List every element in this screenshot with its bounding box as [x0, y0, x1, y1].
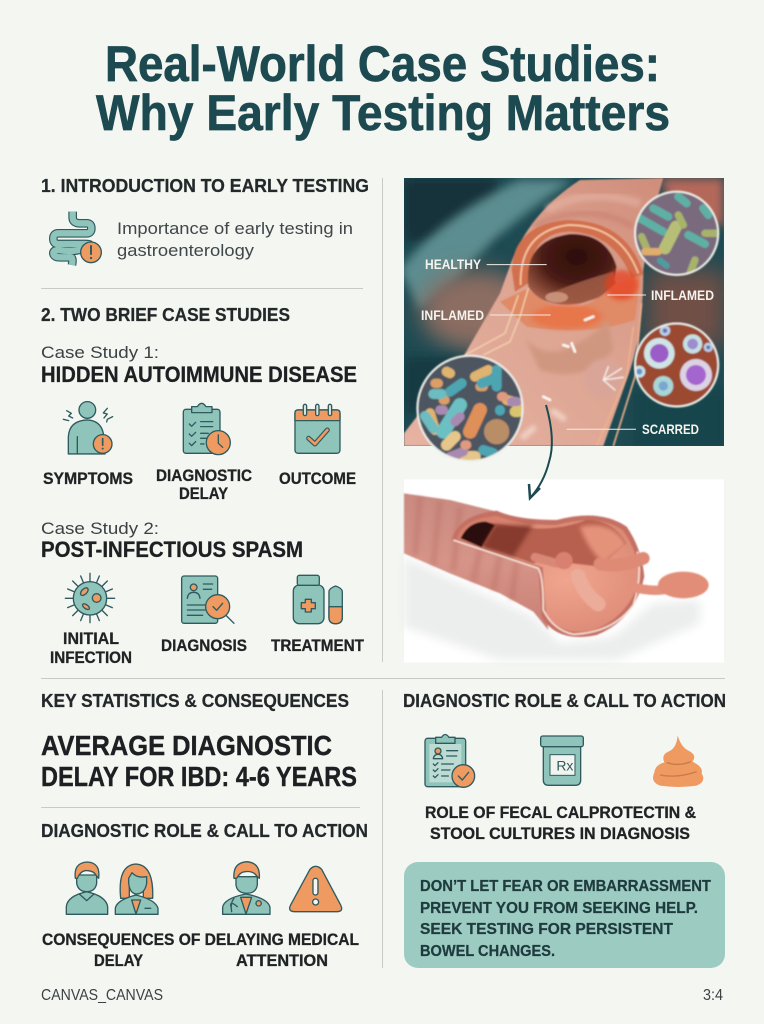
medical illustration: inflamed colon cross section — [400, 178, 727, 461]
panel: introduction — [41, 176, 369, 265]
heading: two brief case studies: 2. TWO BRIEF CASE STUDIES — [41, 305, 290, 325]
icon: doctor — [223, 862, 270, 914]
illustration labels: INFLAMED — [421, 307, 484, 323]
callout lines — [487, 265, 646, 429]
heading: diagnostic role right: DIAGNOSTIC ROLE & CALL TO ACTION — [403, 691, 726, 711]
case study 2 title: Case Study 2: — [41, 519, 159, 538]
intro text: Importance of early testing in — [117, 219, 353, 238]
panel: key statistics — [41, 691, 357, 792]
heading: introduction: 1. INTRODUCTION TO EARLY TESTING — [41, 176, 369, 196]
case study 1 title: Case Study 1: — [41, 343, 159, 362]
panel: consequences of delay — [41, 821, 368, 970]
heading: diagnostic role left: DIAGNOSTIC ROLE & CALL TO ACTION — [41, 821, 368, 841]
icon: symptoms person — [63, 402, 113, 454]
icon: warning triangle — [290, 866, 342, 912]
medical illustration: opened bowel segment — [404, 479, 724, 663]
icon: diagnosis document — [182, 576, 234, 623]
label: symptoms: SYMPTOMS — [43, 470, 133, 488]
statistic: diagnostic delay — [41, 730, 357, 792]
labels: initial infection — [50, 630, 132, 667]
label: consequences of delaying medical attention — [42, 931, 359, 970]
label: consequences of delaying medical attention: DELAY — [94, 952, 143, 970]
callout: call to action — [404, 862, 725, 968]
panel: case studies — [41, 305, 364, 667]
icon: patient woman — [115, 864, 158, 914]
label: outcome: OUTCOME — [279, 470, 356, 488]
label: diagnostic delay: DIAGNOSTIC — [156, 467, 252, 485]
label: consequences of delaying medical attention: CONSEQUENCES OF DELAYING MEDICAL — [42, 931, 359, 949]
micrograph: bacteria top right — [635, 192, 718, 275]
callout: call to action: BOWEL CHANGES. — [420, 943, 555, 960]
label: diagnosis: DIAGNOSIS — [161, 637, 247, 655]
illustration labels: SCARRED — [642, 421, 699, 437]
label: role of fecal calprotectin: ROLE OF FECAL CALPROTECTIN & — [425, 804, 696, 822]
title — [96, 36, 670, 141]
case study 1 title: HIDDEN AUTOIMMUNE DISEASE — [41, 362, 357, 387]
footer: CANVAS_CANVAS — [41, 987, 163, 1004]
footer: 3:4 — [703, 987, 723, 1004]
label: role of fecal calprotectin: STOOL CULTURES IN DIAGNOSIS — [430, 825, 690, 843]
arrow: from scarred tissue to bowel segment — [529, 405, 552, 498]
illustration labels: INFLAMED — [651, 287, 714, 303]
icon: clipboard with check — [425, 734, 475, 787]
heading: key statistics: KEY STATISTICS & CONSEQUENCES — [41, 691, 349, 711]
statistic: diagnostic delay: AVERAGE DIAGNOSTIC — [41, 730, 332, 761]
icon: clipboard with clock — [183, 403, 230, 455]
panel: diagnostic role and call to action — [403, 691, 726, 968]
label: treatment: TREATMENT — [271, 637, 364, 655]
title: Why Early Testing Matters — [96, 85, 670, 141]
case study 2 title: POST-INFECTIOUS SPASM — [41, 537, 303, 562]
callout: call to action: DON’T LET FEAR OR EMBARRASSMENT — [420, 878, 711, 895]
callout: call to action: SEEK TESTING FOR PERSISTENT — [420, 921, 673, 938]
icon: prescription jar — [541, 736, 583, 785]
icon: prescription jar: Rx — [556, 758, 573, 774]
label: consequences of delaying medical attention: ATTENTION — [236, 952, 328, 970]
label: diagnostic delay: DELAY — [179, 485, 228, 503]
label: diagnostic delay — [156, 467, 252, 503]
intro text — [117, 219, 353, 260]
icon: medication bottle and vial — [293, 575, 342, 624]
icon: patient man — [66, 862, 108, 914]
footer — [41, 987, 723, 1004]
illustration labels: HEALTHY — [425, 256, 482, 272]
title: Real-World Case Studies: — [105, 36, 660, 92]
labels: initial infection: INFECTION — [50, 649, 132, 667]
case study 2 title — [41, 519, 303, 562]
callout: call to action: PREVENT YOU FROM SEEKING HELP. — [420, 900, 698, 917]
micrograph: bacteria bottom left — [417, 356, 523, 461]
micrograph: immune cells right — [633, 323, 718, 407]
illustration labels — [421, 256, 714, 437]
statistic: diagnostic delay: DELAY FOR IBD: 4-6 YEARS — [41, 761, 357, 792]
icon: stool sample — [653, 735, 703, 787]
case study 1 title — [41, 343, 357, 387]
intro text: gastroenterology — [117, 241, 255, 260]
labels: initial infection: INITIAL — [63, 630, 119, 648]
icon: intestines with alert — [53, 212, 101, 265]
icon: calendar — [295, 406, 340, 453]
icon: virus — [65, 573, 115, 623]
label: role of fecal calprotectin — [425, 804, 696, 843]
